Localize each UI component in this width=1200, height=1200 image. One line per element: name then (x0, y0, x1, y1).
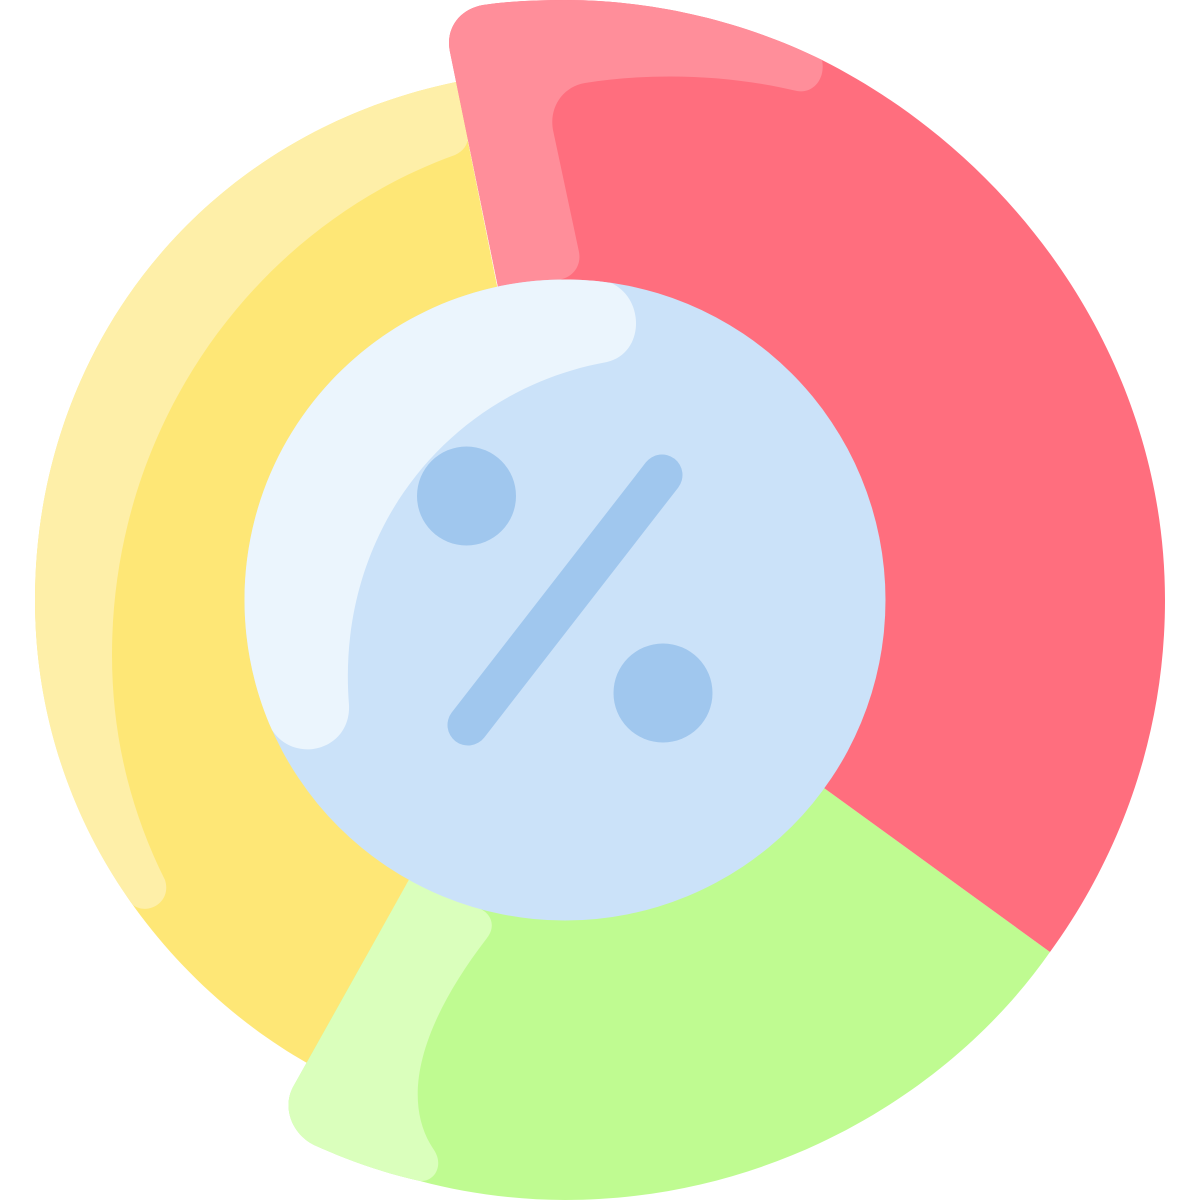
center circle (244, 280, 886, 920)
percent sign (417, 446, 712, 742)
segment: yellow (35, 82, 520, 1063)
center highlight (244, 280, 636, 749)
segment: red (449, 0, 1165, 952)
segment: green (289, 700, 1050, 1200)
